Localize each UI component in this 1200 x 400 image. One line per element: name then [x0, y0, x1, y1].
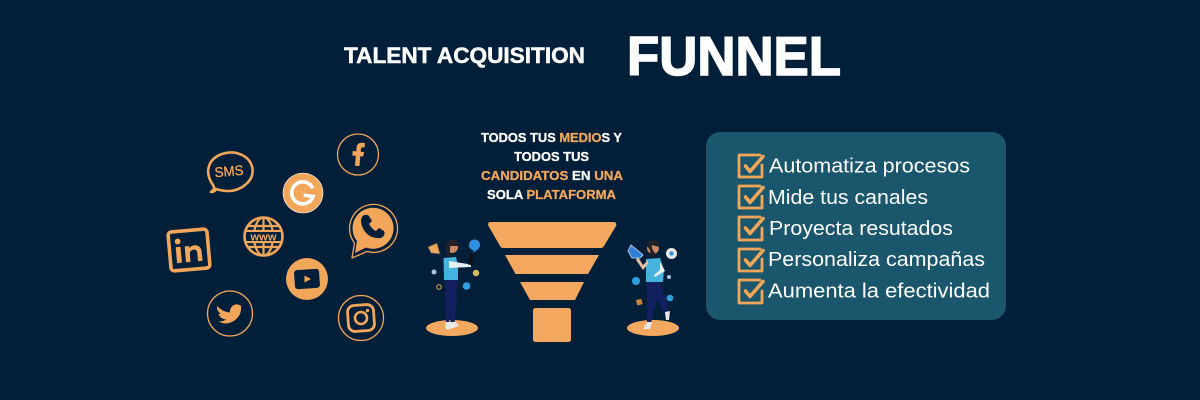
list item: personaliza campañas: Personaliza campañas: [768, 249, 985, 271]
person right: [627, 240, 679, 336]
icon: SMS bubble: SMS: [214, 162, 244, 180]
headline line 1: TODOS TUS MEDIOS Y: [481, 130, 622, 145]
icon: www globe: www: [249, 232, 277, 244]
funnel tier 1: [488, 222, 616, 248]
title: funnel: FUNNEL: [627, 25, 841, 87]
headline line 2: TODOS TUS: [514, 149, 589, 164]
icon: www globe: [244, 218, 282, 256]
title: talent acquisition: TALENT ACQUISITION: [344, 43, 585, 68]
panel: benefits: [706, 132, 1006, 320]
icon cluster: channels: [168, 134, 398, 340]
person left: [426, 240, 480, 336]
headline: todos tus medios: [481, 130, 624, 202]
icon: linkedin: [168, 229, 210, 271]
icon: SMS bubble: [208, 152, 253, 192]
list item: aumenta la efectividad: Aumenta la efectividad: [768, 280, 990, 302]
funnel: [488, 222, 616, 342]
funnel tier 3: [520, 282, 584, 300]
panel background: [706, 132, 1006, 320]
icon: youtube: [286, 258, 328, 300]
icon: twitter: [208, 291, 252, 336]
icon: whatsapp: [350, 204, 398, 258]
title: [344, 25, 841, 87]
social icons: [628, 245, 677, 306]
platform ellipse: [627, 320, 679, 336]
icon: facebook: [338, 134, 378, 175]
platform ellipse: [426, 320, 478, 336]
list item: automatiza procesos: Automatiza procesos: [769, 156, 970, 178]
figure: [444, 240, 474, 330]
funnel stem: [533, 308, 571, 342]
icon: instagram: [338, 296, 384, 340]
funnel tier 2: [505, 255, 599, 274]
figure: [636, 240, 670, 329]
icon: google: [283, 173, 323, 213]
list item: mide tus canales: Mide tus canales: [768, 187, 928, 209]
social icons: [428, 240, 480, 290]
list item: proyecta resutados: Proyecta resutados: [769, 218, 953, 240]
headline line 3: CANDIDATOS EN UNA: [481, 168, 624, 183]
headline line 4: SOLA PLATAFORMA: [487, 187, 617, 202]
